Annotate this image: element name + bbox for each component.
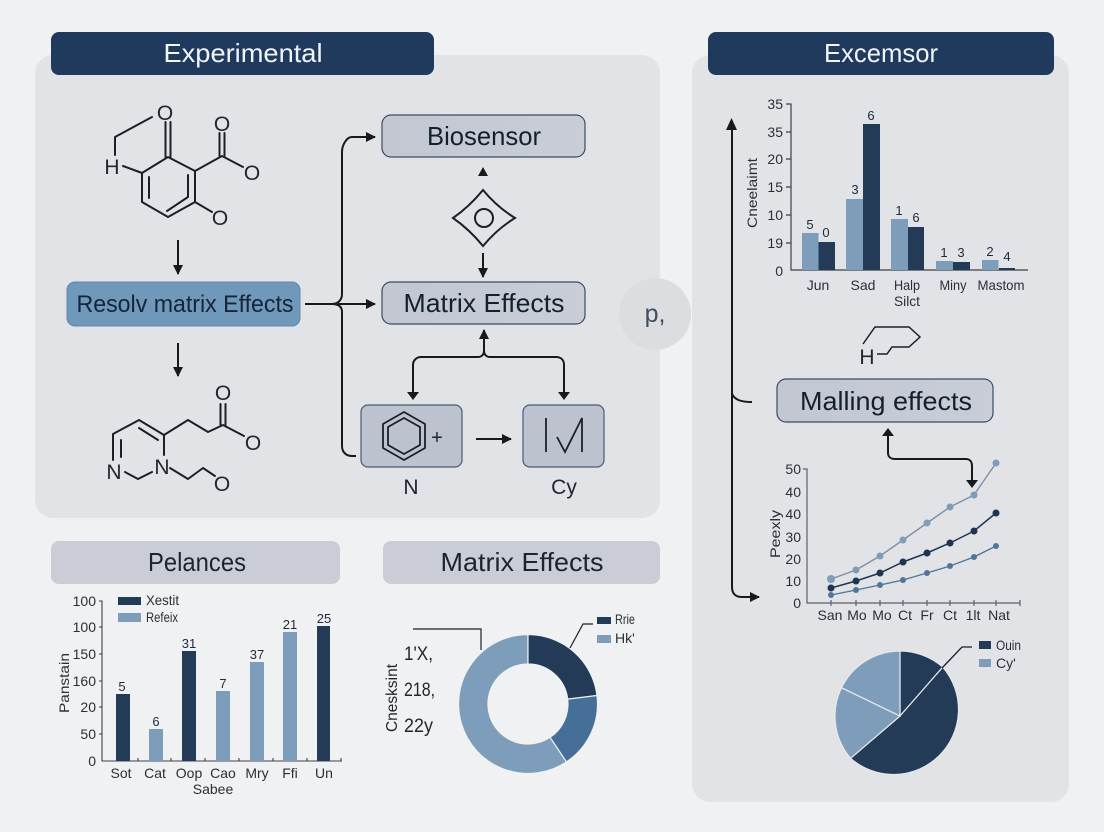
category labels: Cao xyxy=(210,765,236,781)
category labels xyxy=(110,765,333,797)
category labels: Sad xyxy=(851,277,875,293)
bar values: 25 xyxy=(317,611,331,626)
category labels: Mo xyxy=(872,607,892,623)
side values xyxy=(404,644,435,737)
y tick labels: 0 xyxy=(793,595,801,611)
category labels: Oop xyxy=(176,765,202,781)
category labels: Nat xyxy=(988,607,1010,623)
axis title: Cneelaimt xyxy=(744,158,760,228)
legend: Cy' xyxy=(996,655,1016,671)
arrow: diamond to matrix effects xyxy=(482,253,484,277)
box: malling effects xyxy=(777,379,993,422)
category labels xyxy=(818,607,1010,623)
arrow: molecule to resolve box xyxy=(177,240,179,274)
bar values: 1 xyxy=(940,245,948,260)
bar values xyxy=(118,611,331,729)
bar chart: Panstain xyxy=(56,592,342,797)
bar values: 2 xyxy=(986,244,994,259)
legend xyxy=(979,637,1021,671)
bar values xyxy=(806,108,1011,264)
badge: p,: p, xyxy=(645,300,665,328)
arrow: to biosensor xyxy=(478,167,488,176)
heading: Experimental xyxy=(51,32,434,75)
line chart: Peexly xyxy=(767,460,1020,623)
category labels: Silct xyxy=(894,293,920,309)
legend: Refeix xyxy=(146,609,178,625)
category labels: Cat xyxy=(144,765,166,781)
panel: excemsor xyxy=(692,55,1069,802)
category labels: Mo xyxy=(847,607,867,623)
bar values: 37 xyxy=(250,647,264,662)
y tick labels: 40 xyxy=(785,506,801,522)
y tick labels: 100 xyxy=(73,619,96,635)
category labels: Mry xyxy=(245,765,269,781)
icon: molecule bottom: N xyxy=(154,456,170,479)
category labels: 1lt xyxy=(966,607,980,623)
y tick labels: 20 xyxy=(785,551,801,567)
heading: Excemsor xyxy=(708,32,1054,75)
bar values: 0 xyxy=(822,225,830,240)
category labels: Ct xyxy=(898,607,912,623)
y tick labels: 15 xyxy=(767,179,783,195)
axes xyxy=(99,601,342,761)
box: matrix effects xyxy=(382,282,585,324)
bar values: 1 xyxy=(895,203,903,218)
y tick labels: 10 xyxy=(785,573,801,589)
y tick labels: 30 xyxy=(785,529,801,545)
y tick labels: 0 xyxy=(775,263,783,279)
bar values: 5 xyxy=(806,217,814,232)
axis title: Panstain xyxy=(56,653,72,713)
pie chart xyxy=(835,637,1021,774)
arrow: resolve box to molecule xyxy=(177,343,179,376)
leader line xyxy=(942,647,972,668)
icon: molecule bottom: O xyxy=(215,382,231,405)
series: dark xyxy=(828,510,1000,592)
y tick labels: 20 xyxy=(767,151,783,167)
side values: 22y xyxy=(404,716,433,737)
icon: H molecule: H xyxy=(859,346,875,369)
y tick labels: 160 xyxy=(73,673,96,689)
legend: Ouin xyxy=(996,637,1021,653)
category labels: Ct xyxy=(943,607,957,623)
arrow: long vertical connector xyxy=(726,118,759,597)
donut chart xyxy=(384,611,635,774)
icon: molecule top: O xyxy=(244,162,260,185)
label: Cy: Cy xyxy=(551,476,577,499)
series: mid xyxy=(828,543,999,598)
arrow: branch between matrix effects and lower boxes xyxy=(407,330,570,400)
heading: Pelances xyxy=(51,541,340,584)
category labels: Mastom xyxy=(978,277,1024,293)
heading: Matrix Effects xyxy=(383,541,660,584)
category labels xyxy=(807,277,1024,309)
axis title: Cnesksint xyxy=(384,663,401,732)
box: matrix effects: Matrix Effects xyxy=(404,288,564,318)
icon: diamond with circle xyxy=(453,190,515,246)
label: N: N xyxy=(403,476,419,499)
bar values: 6 xyxy=(912,210,920,225)
axis title: Peexly xyxy=(767,510,783,558)
y tick labels: 35 xyxy=(767,124,783,140)
icon: molecule top: O xyxy=(214,113,230,136)
y tick labels: 19 xyxy=(767,235,783,251)
y tick labels xyxy=(73,593,96,769)
bar values: 7 xyxy=(219,676,227,691)
heading: Experimental: Experimental xyxy=(164,38,322,68)
bars xyxy=(802,124,1015,270)
bar values: 4 xyxy=(1003,249,1011,264)
box: malling effects: Malling effects xyxy=(800,386,972,416)
y tick labels: 150 xyxy=(73,646,96,662)
icon: molecule top: H xyxy=(104,156,120,179)
y tick labels: 20 xyxy=(80,699,96,715)
y tick labels: 10 xyxy=(767,207,783,223)
bar values: 21 xyxy=(283,617,297,632)
heading: Matrix Effects: Matrix Effects xyxy=(440,547,604,577)
arrow: branching connector xyxy=(305,137,375,456)
bar chart: Cneelaimt xyxy=(744,96,1028,309)
category labels: Sot xyxy=(110,765,132,781)
icon: molecule top xyxy=(104,102,260,230)
legend: Hk' xyxy=(615,630,635,646)
bar values: 3 xyxy=(957,245,965,260)
legend xyxy=(118,592,179,625)
box: benzene plus: + xyxy=(431,427,443,449)
y tick labels xyxy=(767,96,783,279)
y tick labels: 50 xyxy=(80,726,96,742)
box: check mark xyxy=(523,405,604,467)
icon: molecule bottom: O xyxy=(214,473,230,496)
heading: Excemsor: Excemsor xyxy=(824,38,938,68)
box: biosensor: Biosensor xyxy=(427,121,541,151)
bar values: 3 xyxy=(851,182,859,197)
heading: Pelances: Pelances xyxy=(148,547,246,577)
bar values: 6 xyxy=(867,108,875,123)
legend: Rrie xyxy=(615,611,635,627)
category labels: Un xyxy=(315,765,333,781)
legend: Xestit xyxy=(146,592,179,608)
y tick labels xyxy=(785,461,801,611)
icon: H molecule xyxy=(859,327,920,369)
category labels: Fr xyxy=(920,607,934,623)
category labels: Halp xyxy=(894,277,920,293)
box: resolve matrix effects: Resolv matrix Effects xyxy=(76,291,294,318)
slices xyxy=(835,651,959,774)
y tick labels: 0 xyxy=(88,753,96,769)
series: light xyxy=(827,460,1000,583)
icon: molecule top: O xyxy=(157,102,173,125)
bar values: 5 xyxy=(118,679,126,694)
icon: molecule bottom: N xyxy=(106,461,122,484)
slices xyxy=(459,634,598,774)
side values: 218, xyxy=(404,680,435,701)
badge: p, xyxy=(619,278,691,350)
leader lines xyxy=(413,624,593,650)
bar values: 31 xyxy=(182,636,196,651)
icon: molecule top: O xyxy=(212,207,228,230)
y tick labels: 35 xyxy=(767,96,783,112)
icon: molecule bottom: O xyxy=(245,432,261,455)
axes xyxy=(803,469,1020,606)
y tick labels: 40 xyxy=(785,484,801,500)
icon: molecule bottom xyxy=(106,382,261,496)
panel: experimental xyxy=(35,55,660,518)
box: resolve matrix effects xyxy=(67,282,300,326)
y tick labels: 50 xyxy=(785,461,801,477)
bars xyxy=(116,626,330,761)
category labels: Sabee xyxy=(193,781,233,797)
box: benzene plus xyxy=(361,405,462,467)
arrow: benzene to check box xyxy=(476,438,511,440)
category labels: Ffi xyxy=(282,765,298,781)
category labels: Miny xyxy=(940,277,966,293)
y axis xyxy=(786,104,1028,270)
box: biosensor xyxy=(382,115,585,157)
y tick labels: 100 xyxy=(73,593,96,609)
side values: 1'X, xyxy=(404,644,433,665)
category labels: Jun xyxy=(807,277,829,293)
category labels: San xyxy=(818,607,842,623)
bar values: 6 xyxy=(152,714,160,729)
arrow: malling effects to line chart xyxy=(882,428,978,488)
legend xyxy=(597,611,635,646)
